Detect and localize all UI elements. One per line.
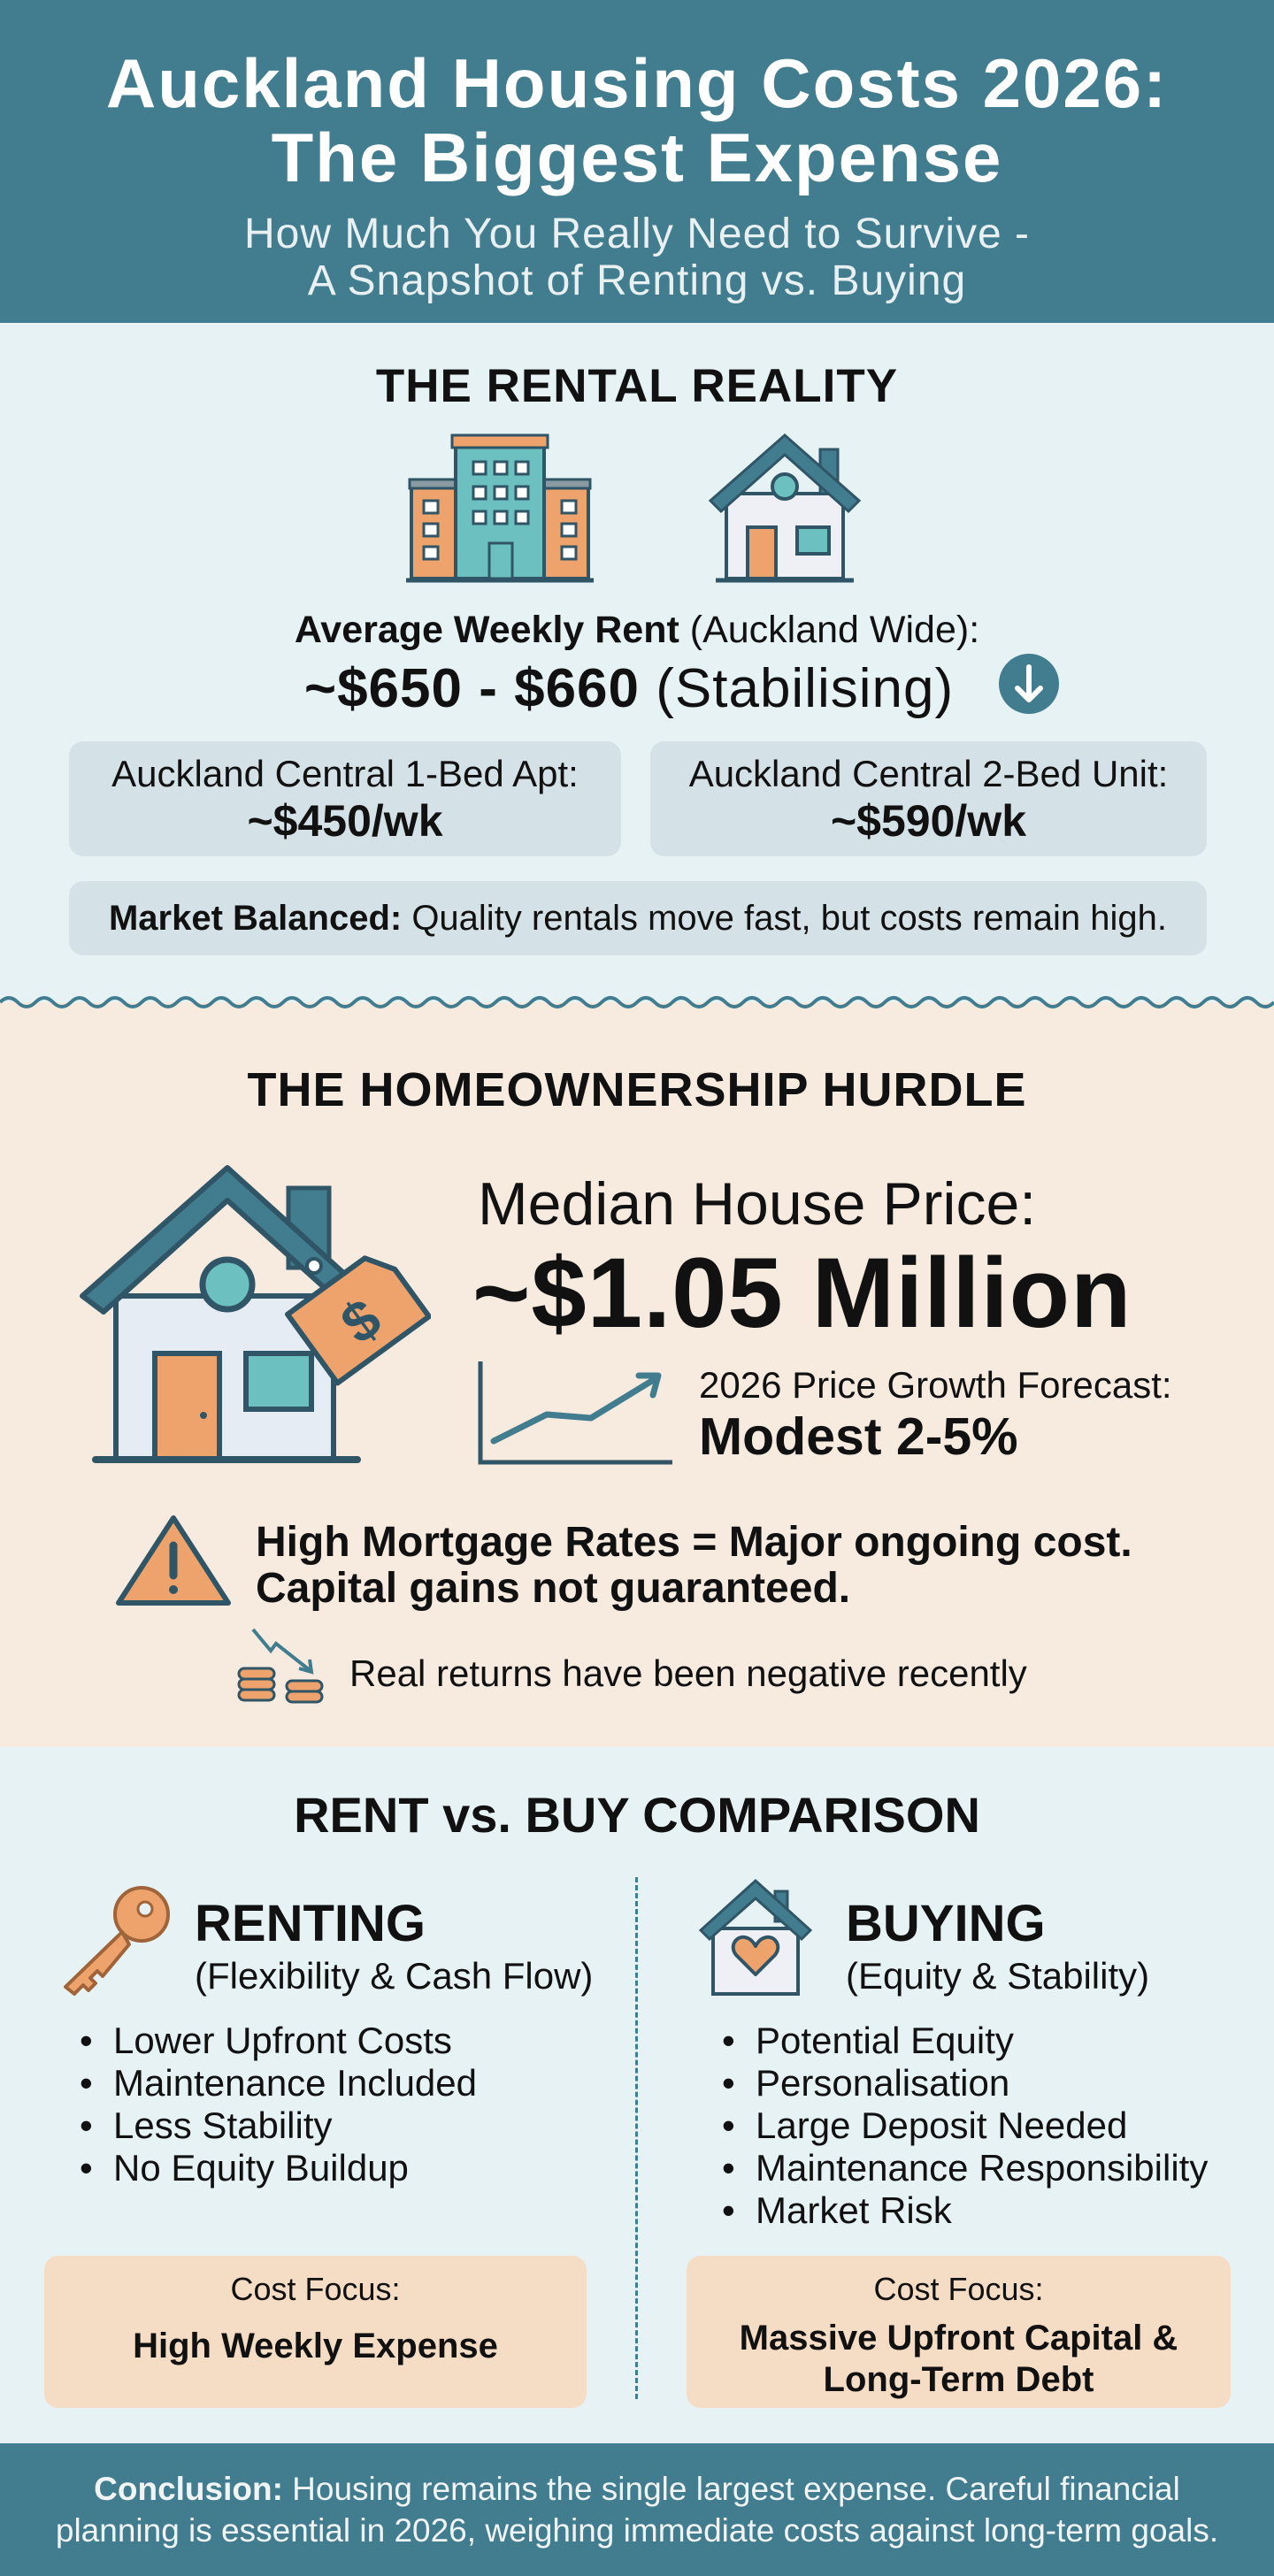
column: buying — [699, 1879, 1209, 2231]
list: buying: • Personalisation — [722, 2062, 1009, 2104]
card: renting cost focus: Cost Focus: — [230, 2271, 401, 2307]
card: buying cost focus: Long-Term Debt — [824, 2360, 1094, 2399]
list: buying: • Market Risk — [722, 2189, 952, 2231]
header — [0, 0, 1274, 323]
text: forecast: 2026 Price Growth Forecast: — [699, 1364, 1172, 1406]
title: Auckland Housing Costs 2026: — [106, 44, 1168, 122]
heading: homeownership: THE HOMEOWNERSHIP HURDLE — [247, 1063, 1027, 1116]
text: average weekly rent label: Average Weekly Rent (Auckland Wide): — [295, 609, 979, 651]
card: 1-bed — [69, 741, 621, 856]
text: buying title: BUYING — [846, 1895, 1046, 1952]
divider dashed — [635, 1877, 638, 2399]
text: renting title: RENTING — [195, 1895, 426, 1952]
title — [106, 44, 1168, 196]
footer: conclusion — [0, 2443, 1274, 2576]
chart: growth forecast — [478, 1361, 672, 1465]
card: buying cost focus: Cost Focus: — [873, 2271, 1044, 2307]
card: renting cost focus: High Weekly Expense — [133, 2327, 498, 2365]
icon: key — [64, 1886, 170, 1996]
text: mortgage warning — [256, 1519, 1132, 1612]
text: forecast — [699, 1364, 1172, 1466]
list: renting: • Less Stability — [80, 2104, 333, 2146]
icon: warning — [116, 1515, 231, 1606]
icon: coins falling — [237, 1628, 324, 1704]
heading: comparison: RENT vs. BUY COMPARISON — [294, 1787, 980, 1843]
card: buying cost focus — [687, 2256, 1231, 2408]
list: buying — [722, 2020, 1209, 2231]
subtitle: How Much You Really Need to Survive - — [244, 211, 1030, 257]
card: buying cost focus: Massive Upfront Capital & — [740, 2319, 1178, 2358]
divider wave — [0, 996, 1274, 1008]
text: renting subtitle: (Flexibility & Cash Flow) — [195, 1955, 593, 1997]
card: 1-bed: ~$450/wk — [247, 796, 443, 846]
icon: house — [708, 433, 862, 582]
callout: market balanced: Market Balanced: Quality rentals move fast, but costs remain high. — [109, 899, 1167, 938]
text: buying subtitle: (Equity & Stability) — [846, 1955, 1149, 1997]
list: renting — [80, 2020, 477, 2189]
heading: rental: THE RENTAL REALITY — [376, 360, 898, 412]
card: 2-bed: Auckland Central 2-Bed Unit: — [689, 753, 1168, 794]
list: buying: • Large Deposit Needed — [722, 2104, 1127, 2146]
text: median price value: ~$1.05 Million — [472, 1238, 1132, 1348]
icon: house with price tag — [80, 1165, 431, 1463]
icon: down arrow — [999, 654, 1059, 714]
text: mortgage warning: High Mortgage Rates = Major ongoing cost. — [256, 1519, 1132, 1566]
footer: conclusion: Conclusion: Housing remains the single largest expense. Careful financial — [94, 2471, 1180, 2507]
subtitle — [244, 211, 1030, 304]
card: 2-bed — [650, 741, 1207, 856]
text: average rent value: ~$650 - $660 (Stabilising) — [304, 658, 954, 719]
card: renting cost focus — [44, 2256, 587, 2408]
list: buying: • Maintenance Responsibility — [722, 2147, 1208, 2189]
panel: homeownership — [0, 1002, 1274, 1747]
list: renting: • No Equity Buildup — [80, 2147, 409, 2189]
column: renting — [64, 1886, 593, 2189]
callout: market balanced — [69, 881, 1207, 955]
card: 1-bed: Auckland Central 1-Bed Apt: — [111, 753, 579, 794]
footer: conclusion: planning is essential in 2026, weighing immediate costs against long-term goals. — [56, 2512, 1218, 2549]
text: forecast: Modest 2-5% — [699, 1407, 1018, 1466]
text: median house price label: Median House Price: — [478, 1170, 1036, 1238]
text: real returns: Real returns have been negative recently — [349, 1652, 1027, 1694]
subtitle: A Snapshot of Renting vs. Buying — [308, 257, 966, 304]
list: renting: • Lower Upfront Costs — [80, 2020, 452, 2061]
icon: house with price tag: $ — [329, 1286, 392, 1356]
icon: house with heart — [699, 1879, 812, 1996]
list: buying: • Potential Equity — [722, 2020, 1014, 2061]
icon: apartment building — [406, 433, 594, 582]
card: 2-bed: ~$590/wk — [831, 796, 1026, 846]
text: mortgage warning: Capital gains not guaranteed. — [256, 1565, 850, 1612]
panel: rental reality — [0, 323, 1274, 1004]
title: The Biggest Expense — [272, 119, 1002, 196]
panel: rent vs buy comparison — [0, 1747, 1274, 2443]
list: renting: • Maintenance Included — [80, 2062, 477, 2104]
